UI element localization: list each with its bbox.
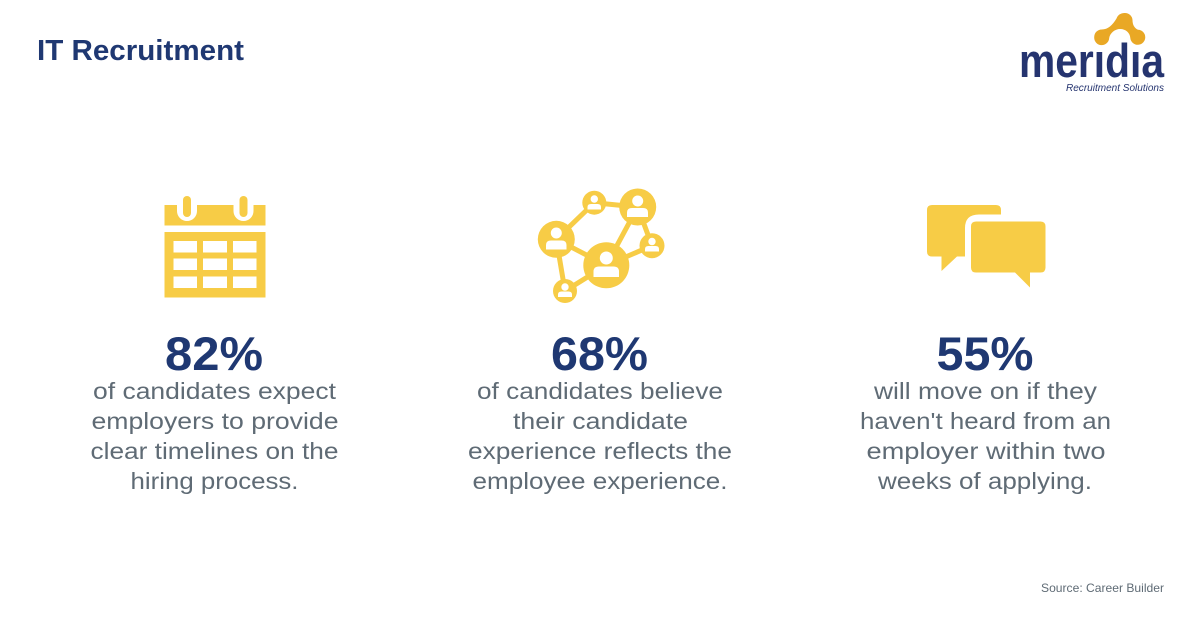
text: 55% description [860, 378, 1111, 494]
text: 82% description: employers to provide [92, 408, 338, 434]
icon: logo mark [1094, 13, 1145, 45]
text: 55% description: haven't heard from an [860, 408, 1111, 434]
logo wordmark: meridia [1019, 34, 1165, 87]
text: 68% description: their candidate [513, 408, 688, 434]
text: 82% description: clear timelines on the [90, 438, 338, 464]
title: IT Recruitment [37, 35, 245, 67]
text: 68% description: of candidates believe [477, 378, 723, 404]
stat: 82%: 82% [165, 327, 263, 380]
stat: 55%: 55% [936, 327, 1034, 380]
text: 55% description: employer within two [866, 438, 1106, 464]
icon: people network [538, 188, 664, 303]
panel: 55% response [860, 205, 1111, 494]
text: 68% description [468, 378, 732, 494]
text: 68% description: experience reflects the [468, 438, 732, 464]
text: 68% description: employee experience. [472, 468, 728, 494]
panel: 82% timelines [90, 196, 338, 494]
text: 82% description: of candidates expect [93, 378, 337, 404]
icon: calendar [164, 196, 266, 298]
stat: 68%: 68% [551, 327, 648, 380]
text: 82% description: hiring process. [130, 468, 298, 494]
source note: Source: Career Builder [1041, 581, 1164, 595]
text: 55% description: will move on if they [873, 378, 1098, 404]
icon: chat bubbles [927, 205, 1046, 288]
text: 82% description [90, 378, 338, 494]
panel: 68% experience [468, 188, 732, 494]
logo: meridia [1019, 13, 1165, 94]
text: 55% description: weeks of applying. [877, 468, 1092, 494]
logo tagline: Recruitment Solutions [1066, 82, 1165, 94]
